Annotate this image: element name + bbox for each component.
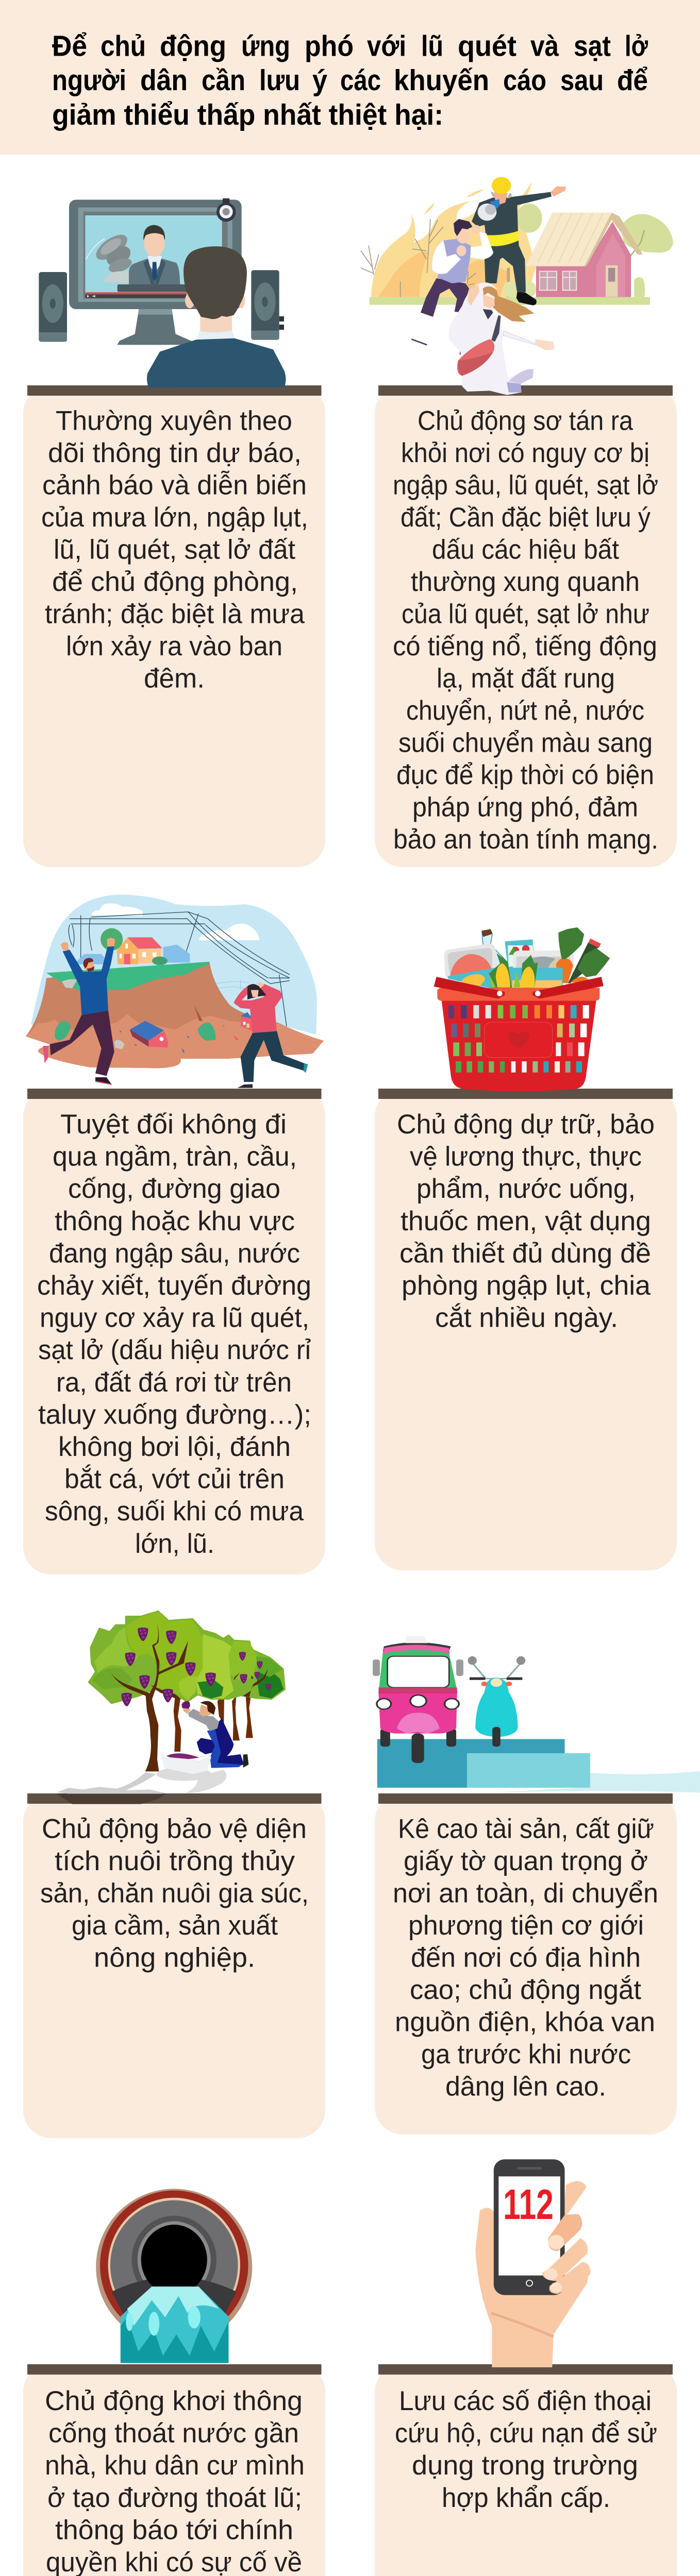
title: chủ [101,30,146,63]
text block: card 5 [40,1814,309,1973]
title: sạt [574,30,611,63]
text block: card 3: lớn, lũ. [135,1529,214,1559]
text block: card 1: để chủ động phòng, [52,567,298,597]
text block: card 1: đêm. [144,663,205,693]
panel: kê cao tài sản [375,1793,677,2134]
text block: card 3: Tuyệt đối không đi [60,1109,287,1140]
text block: card 3: taluy xuống đường…); [38,1399,311,1430]
icon: evacuation from fire with firefighter and house [361,177,673,395]
panel: khơi thông cống [23,2364,325,2576]
title: các [340,64,381,97]
text block: card 2: lạ, mặt đất rung [437,663,615,693]
text block: card 5: gia cầm, sản xuất [72,1910,278,1941]
text block: card 4: Chủ động dự trữ, bảo [397,1109,655,1140]
title: ứng [241,30,290,63]
text block: card 4: phòng ngập lụt, chia [402,1270,651,1301]
text block: card 2: bảo an toàn tính mạng. [393,824,658,855]
title: quét [458,30,516,63]
text block: card 6: ga trước khi nước [421,2039,631,2070]
text block: card 3: sông, suối khi có mưa [45,1496,304,1527]
panel: theo dõi thông tin dự báo [23,385,325,867]
text block: card 3 [37,1109,311,1559]
text block: card 1: Thường xuyên theo [56,405,292,436]
text block: card 4: cần thiết đủ dùng đề [399,1238,651,1268]
text block: card 6: Kê cao tài sản, cất giữ [398,1814,654,1844]
text block: card 8: dụng trong trường [412,2450,638,2481]
text block: card 7: cống thoát nước gần [48,2418,299,2449]
header panel [0,0,700,155]
title: cần [202,64,245,97]
title: giảm thiểu thấp nhất thiệt hại: [52,98,443,131]
text block: card 2: đục để kịp thời có biện [396,760,654,790]
text block: card 2: ngập sâu, lũ quét, sạt lở [393,470,658,500]
text block: card 1: của mưa lớn, ngập lụt, [41,502,308,533]
title: sau [560,64,604,97]
icon: landslide with people running [26,894,324,1088]
text block: card 1: lũ, lũ quét, sạt lở đất [54,534,295,565]
text block: card 4 [397,1109,655,1333]
text block: card 3: nguy cơ xảy ra lũ quét, [40,1303,309,1333]
text block: card 2 [393,405,658,855]
text block: card 8: Lưu các số điện thoại [399,2386,652,2416]
title: để [617,64,648,97]
icon: food basket [434,927,610,1091]
text block: card 3: không bơi lội, đánh [58,1432,291,1462]
text block: card 2: chuyển, nứt nẻ, nước [406,696,644,726]
text block: card 2: suối chuyển màu sang [398,727,653,758]
text block: card 7: nhà, khu dân cư mình [45,2450,305,2481]
title: khuyến [394,64,489,97]
text block: card 3: sạt lở (dấu hiệu nước rỉ [38,1335,311,1365]
text block: card 7: Chủ động khơi thông [45,2386,303,2416]
panel: sơ tán [375,385,677,867]
title: dân [140,64,188,97]
panel: tuyệt đối không đi qua [23,1089,325,1574]
text block: card 3: ra, đất đá rơi từ trên [56,1367,292,1398]
text block: card 7: ở tạo đường thoát lũ; [47,2483,302,2513]
text block: card 8 [395,2386,657,2513]
icon: grape trees and farmer [57,1612,285,1804]
text block: card 2: dấu các hiệu bất [432,534,619,565]
text block: card 2: thường xung quanh [411,567,640,597]
text block: card 2: của lũ quét, sạt lở như [402,599,649,629]
text block: card 8: cứu hộ, cứu nạn để sử [395,2418,657,2449]
number 112: 112 [503,2180,554,2228]
text block: card 3: cống, đường giao [68,1174,280,1204]
text block: card 5: sản, chăn nuôi gia súc, [40,1878,309,1908]
text block: card 1: dõi thông tin dự báo, [48,438,302,468]
title: và [530,30,559,63]
text block: card 5: nông nghiệp. [94,1942,255,1973]
panel: dự trữ lương thực [375,1089,677,1570]
text block: card 6: giấy tờ quan trọng ở [404,1846,648,1876]
text block: card 6: cao; chủ động ngắt [410,1975,641,2005]
text block: card 8: hợp khẩn cấp. [442,2483,610,2513]
icon: hand holding phone showing 112 [475,2159,590,2367]
text block: card 6: dâng lên cao. [445,2071,606,2102]
icon: man watching weather news on monitor [39,198,286,388]
text block: card 3: chảy xiết, tuyến đường [37,1270,311,1301]
text block: card 1 [41,405,308,693]
title: động [160,30,226,63]
text block: card 1: cảnh báo và diễn biến [42,470,307,500]
text block: card 3: bắt cá, vớt củi trên [64,1464,285,1495]
text block: card 4: cắt nhiều ngày. [435,1303,618,1333]
text block: card 4: phẩm, nước uống, [416,1174,636,1204]
text block: card 4: thuốc men, vật dụng [401,1206,651,1236]
icon: drain pipe with water [96,2189,252,2363]
title: lưu [259,64,300,97]
text block: card 2: đất; Cần đặc biệt lưu ý [401,502,651,533]
title: lở [625,30,648,63]
text block: card 6: nguồn điện, khóa van [395,2007,655,2037]
text block: card 6: đến nơi có địa hình [411,1942,641,1973]
text block: card 6: nơi an toàn, di chuyển [393,1878,658,1908]
text block: card 6 [393,1814,658,2102]
text block: card 4: vệ lương thực, thực [410,1142,642,1172]
title: ý [312,64,327,97]
text block: card 3: thông hoặc khu vực [55,1206,295,1236]
title: với [367,30,406,63]
title [52,30,648,131]
title: người [52,64,126,97]
text block: card 5: Chủ động bảo vệ diện [42,1814,307,1844]
text block: card 2: khỏi nơi có nguy cơ bị [401,438,649,468]
text block: card 5: tích nuôi trồng thủy [55,1846,295,1876]
title: phó [305,30,354,63]
text block: card 1: lớn xảy ra vào ban [66,631,282,662]
text block: card 6: phương tiện cơ giới [408,1910,644,1941]
text block: card 2: pháp ứng phó, đảm [412,792,638,822]
title: lũ [421,30,443,63]
icon: tuk-tuk and scooter on raised platform [373,1636,700,1792]
text block: card 7: thông báo tới chính [55,2515,293,2545]
text block: card 7 [37,2386,311,2576]
text block: card 1: tránh; đặc biệt là mưa [45,599,305,629]
title: Để [52,30,87,63]
title: cáo [503,64,546,97]
text block: card 3: qua ngầm, tràn, cầu, [53,1142,297,1172]
text block: card 2: có tiếng nổ, tiếng động [393,631,657,662]
panel: bảo vệ diện tích nuôi trồng [23,1793,325,2138]
text block: card 3: đang ngập sâu, nước [49,1238,300,1268]
panel: lưu số điện thoại [375,2364,677,2576]
text block: card 2: Chủ động sơ tán ra [418,405,633,436]
